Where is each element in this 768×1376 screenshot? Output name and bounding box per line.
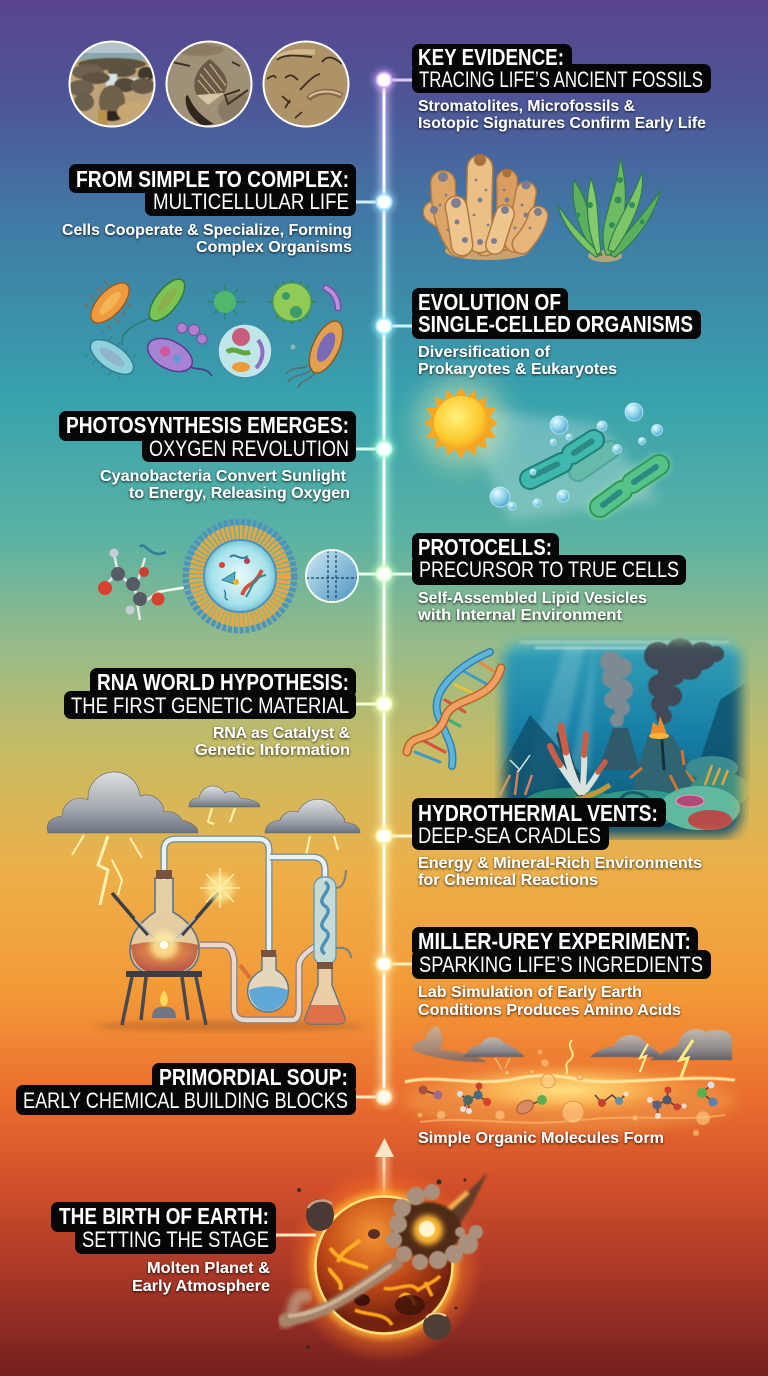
description: multicellular life [62, 222, 352, 256]
heading: key evidence: KEY EVIDENCE: [418, 44, 564, 70]
heading: primordial soup: EARLY CHEMICAL BUILDING BLOCKS [23, 1088, 348, 1113]
icon: tripod and burner [122, 971, 206, 1025]
description: RNA world [195, 725, 350, 759]
heading: RNA world [64, 668, 356, 719]
description: protocells [417, 590, 647, 624]
arrow: upward direction of time [375, 1138, 394, 1200]
heading: Miller-Urey: MILLER-UREY EXPERIMENT: [418, 928, 691, 954]
heading: single-celled organisms: EVOLUTION OF [418, 289, 561, 315]
icon: trilobite fossil photo [166, 41, 262, 127]
description: single-celled organisms: Diversification of [418, 344, 551, 361]
heading: hydrothermal vents [412, 798, 666, 850]
description: birth of Earth: Molten Planet & [147, 1260, 270, 1277]
heading: photosynthesis [59, 411, 356, 462]
icon: cyanobacteria chains [530, 440, 659, 507]
timeline spine [380, 80, 388, 1196]
timeline connectors and nodes [356, 69, 412, 1108]
icon: storm clouds [47, 772, 360, 833]
icon: green algae [558, 157, 661, 262]
description: hydrothermal vents [418, 855, 702, 889]
heading: hydrothermal vents: HYDROTHERMAL VENTS: [418, 800, 658, 826]
panel: hydrothermal vents [412, 798, 702, 889]
icon: protocell vesicle [186, 522, 294, 630]
heading: photosynthesis: PHOTOSYNTHESIS EMERGES: [66, 412, 349, 438]
description: photosynthesis [100, 468, 350, 502]
heading: Miller-Urey: SPARKING LIFE’S INGREDIENTS [419, 952, 703, 977]
connector: Earth to label [276, 1234, 316, 1236]
description: birth of Earth [132, 1260, 270, 1295]
description: primordial soup: Simple Organic Molecules Form [418, 1130, 664, 1147]
illustration: primordial soup scene [405, 1026, 735, 1132]
panel: primordial soup [16, 1026, 735, 1147]
icon: molecule diagram [98, 545, 187, 620]
icon: tube worms [550, 726, 605, 792]
description: multicellular life: Complex Organisms [196, 239, 352, 256]
heading: RNA world: RNA WORLD HYPOTHESIS: [97, 669, 349, 695]
icon: sponge colony [430, 154, 542, 260]
heading: Miller-Urey [412, 927, 711, 979]
icon: sun [424, 387, 498, 459]
icon: microfossil imprint photo [263, 41, 349, 127]
heading: hydrothermal vents: DEEP-SEA CRADLES [418, 823, 601, 848]
panel: photosynthesis [59, 377, 662, 520]
description: photosynthesis: Cyanobacteria Convert Sunlight [100, 468, 346, 485]
heading: multicellular life: MULTICELLULAR LIFE [153, 189, 349, 214]
icon: dark smoke plume [644, 638, 724, 724]
panel: hydrothermal vent scene [495, 632, 750, 840]
heading: RNA world: THE FIRST GENETIC MATERIAL [71, 693, 349, 718]
icon: soup lightning [495, 1040, 693, 1080]
description: Miller-Urey: Lab Simulation of Early Earth [418, 984, 642, 1001]
icon: impact smoke ring [386, 1184, 483, 1270]
description: RNA world: RNA as Catalyst & [213, 725, 350, 742]
heading: primordial soup [16, 1063, 356, 1115]
description: single-celled organisms: Prokaryotes & Eukaryotes [418, 361, 617, 378]
icon: molten planet [310, 1191, 458, 1339]
description: single-celled organisms [418, 344, 617, 378]
heading: primordial soup: PRIMORDIAL SOUP: [159, 1064, 348, 1090]
icon: corals [500, 755, 750, 830]
icon: condenser coil [314, 870, 351, 965]
icon: molten Earth impact [285, 1167, 488, 1363]
icon: RNA double helix [407, 652, 501, 766]
icon: erlenmeyer flask [305, 962, 345, 1024]
heading: birth of Earth [51, 1202, 276, 1254]
heading: birth of Earth: SETTING THE STAGE [82, 1227, 269, 1252]
heading: protocells [412, 533, 686, 585]
panel: birth of Earth [51, 1167, 488, 1363]
description: protocells: with Internal Environment [417, 607, 622, 624]
icon: microbes group [78, 271, 350, 388]
panel: protocells [98, 522, 686, 630]
icon: grey smoke plume [600, 651, 633, 727]
description: RNA world: Genetic Information [195, 742, 350, 759]
icon: floating organic molecules [418, 1050, 718, 1136]
description: key evidence: Stromatolites, Microfossils & [418, 98, 635, 115]
panel: Miller-Urey experiment [47, 772, 711, 1031]
icon: stromatolite photo [68, 41, 155, 127]
description: multicellular life: Cells Cooperate & Specialize, Forming [62, 222, 352, 239]
panel: multicellular life [62, 154, 661, 262]
description: hydrothermal vents: Energy & Mineral-Rich Environments [418, 855, 702, 872]
panel: RNA world [64, 652, 501, 766]
icon: collection flask [240, 950, 288, 1012]
heading: single-celled organisms: SINGLE-CELLED ORGANISMS [418, 311, 693, 337]
icon: comet tail [428, 1172, 488, 1240]
icon: reaction flask [112, 868, 240, 975]
description: photosynthesis: to Energy, Releasing Oxygen [129, 485, 350, 502]
heading: birth of Earth: THE BIRTH OF EARTH: [59, 1203, 269, 1229]
description: key evidence: Isotopic Signatures Confirm Early Life [418, 115, 706, 132]
panel: key evidence fossils [68, 41, 711, 132]
heading: protocells: PROTOCELLS: [418, 534, 552, 560]
heading: protocells: PRECURSOR TO TRUE CELLS [419, 557, 679, 582]
icon: lightning bolts [72, 808, 338, 905]
description: birth of Earth: Early Atmosphere [132, 1278, 270, 1295]
heading: key evidence [412, 44, 711, 93]
description: Miller-Urey: Conditions Produces Amino Acids [418, 1002, 681, 1019]
icon: oxygen bubbles [490, 403, 662, 510]
icon: glass tubing [164, 839, 325, 1020]
illustration: sun and cyanobacteria [415, 377, 662, 520]
panel: single-celled organisms [78, 271, 701, 388]
icon: dust band [285, 1263, 397, 1322]
icon: Miller-Urey glass apparatus [95, 839, 365, 1031]
description: hydrothermal vents: for Chemical Reactions [418, 872, 598, 889]
heading: multicellular life: FROM SIMPLE TO COMPLEX: [76, 166, 349, 192]
description: protocells: Self-Assembled Lipid Vesicles [418, 590, 647, 607]
icon: asteroids [297, 1178, 466, 1349]
heading: single-celled organisms [412, 288, 701, 339]
heading: photosynthesis: OXYGEN REVOLUTION [149, 436, 349, 461]
icon: background rock silhouettes [495, 680, 750, 810]
description: Miller-Urey [418, 984, 681, 1019]
icon: volcanic vents [600, 716, 697, 794]
heading: multicellular life [69, 164, 356, 216]
icon: soup clouds [412, 1026, 732, 1062]
description: key evidence [418, 98, 706, 132]
icon: membrane cross-section [306, 550, 358, 602]
